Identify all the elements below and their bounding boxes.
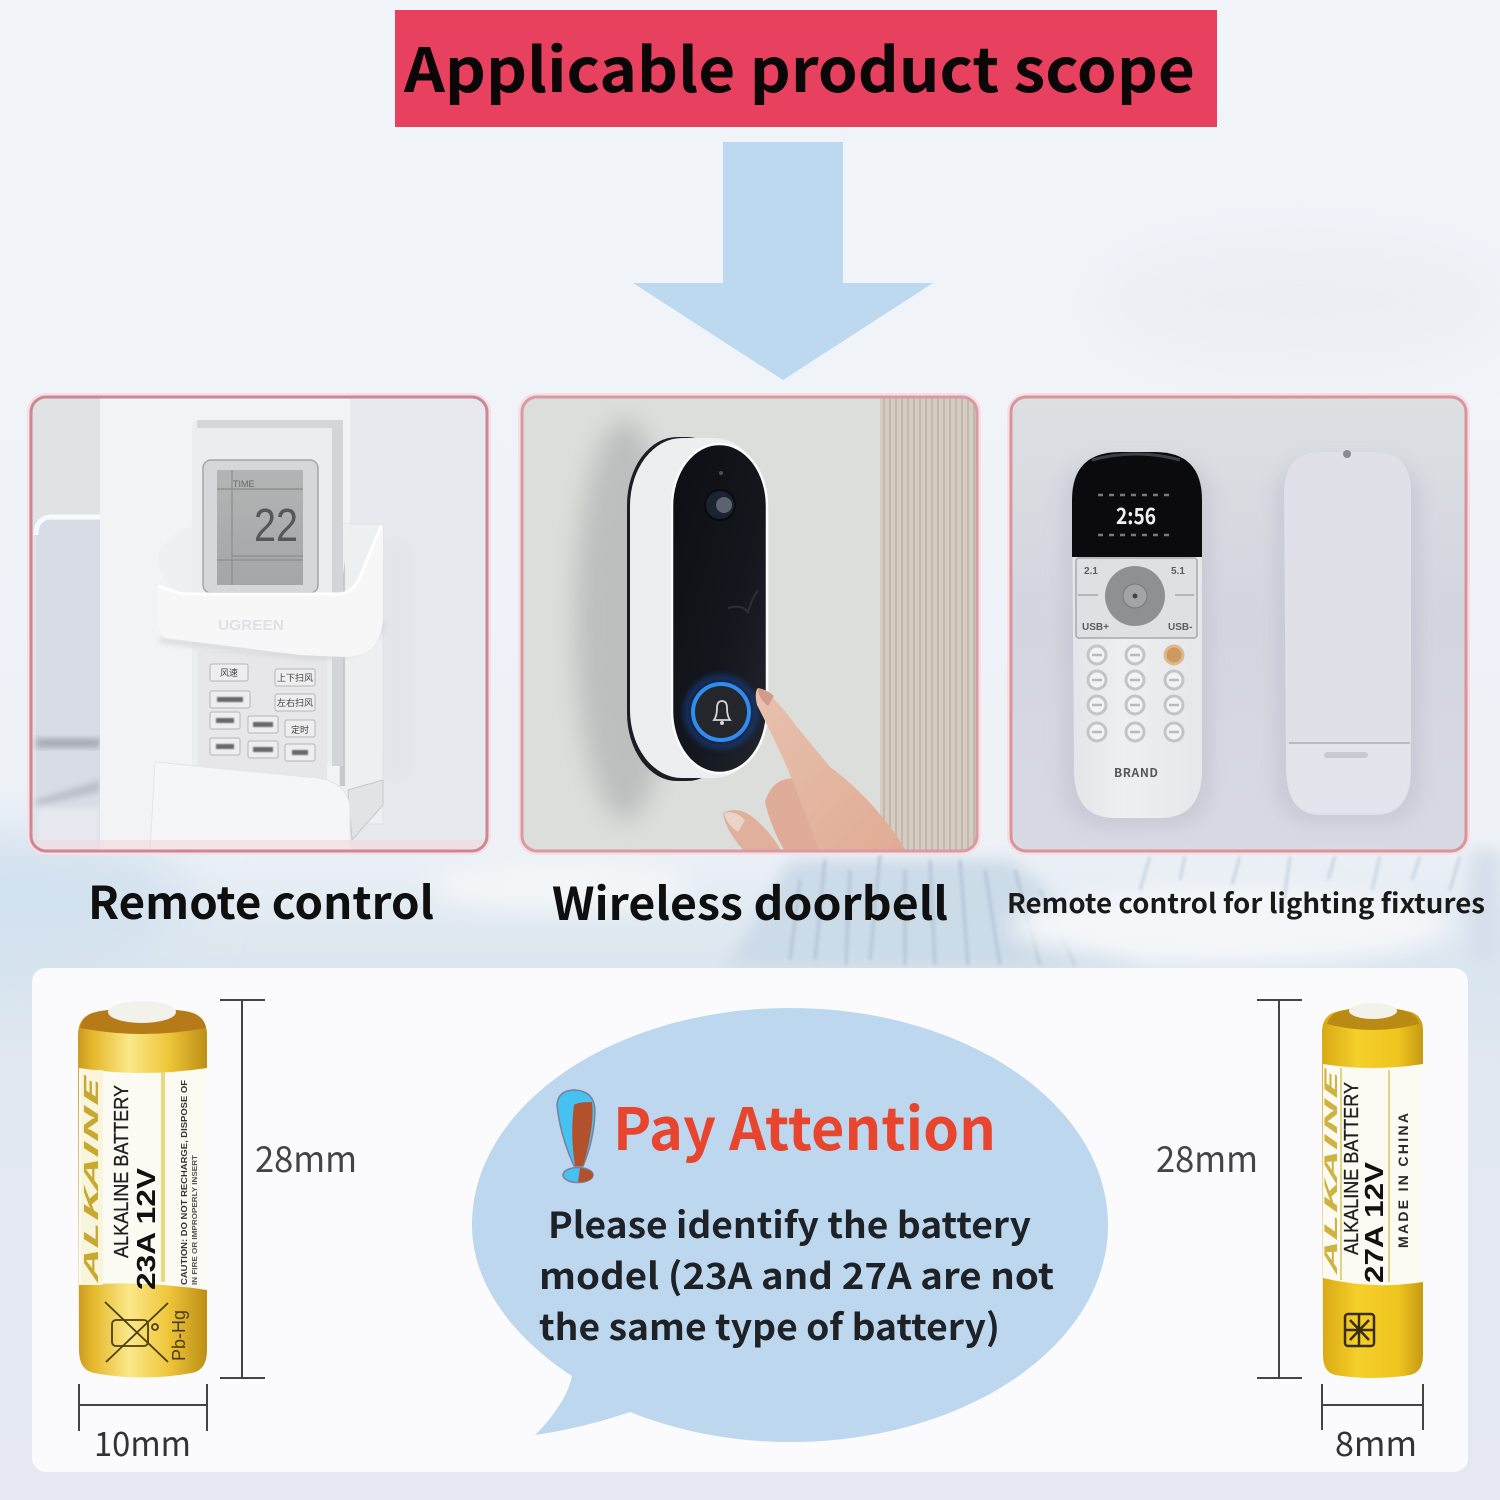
- dimension: 27A diameter: [1322, 1384, 1423, 1466]
- panel: wireless doorbell photo: [521, 396, 979, 852]
- remote front: 2:56: [1116, 499, 1156, 531]
- title banner: Applicable product scope: [403, 21, 1195, 110]
- warning message: Please identify the battery: [548, 1197, 1031, 1249]
- dimension: 27A diameter: 8mm: [1335, 1417, 1417, 1466]
- speech bubble: [472, 1008, 1108, 1442]
- battery 27A: [1317, 1003, 1423, 1378]
- caption: wireless doorbell: Wireless doorbell: [552, 868, 948, 933]
- dimension: 23A diameter: [79, 1384, 207, 1466]
- panel: battery comparison card: [32, 968, 1468, 1472]
- dimension: 23A diameter: 10mm: [94, 1417, 191, 1466]
- battery 23A: CAUTION: DO NOT RECHARGE, DISPOSE OF: [179, 1080, 189, 1285]
- caption: lighting remote: Remote control for lighting fixtures: [1007, 882, 1485, 921]
- arrow pointing down: [633, 142, 933, 380]
- dimension: 23A height: 28mm: [255, 1131, 357, 1183]
- icon: exclamation mark: [557, 1090, 595, 1182]
- panel: remote control photo: [30, 396, 488, 860]
- remote buttons: [1088, 646, 1183, 741]
- remote keypad: 风速: [220, 666, 238, 679]
- remote keypad: 定时: [291, 723, 309, 736]
- panel: lighting remote photo: [1010, 396, 1468, 852]
- remote keypad: 上下扫风: [277, 671, 313, 684]
- remote front: 2.1: [1084, 566, 1098, 577]
- holder front band: UGREEN: [218, 617, 284, 634]
- doorbell body: [627, 437, 767, 781]
- battery 23A: [77, 1001, 207, 1378]
- recycling mark: [1345, 1314, 1374, 1346]
- warning message: model (23A and 27A are not: [539, 1248, 1054, 1300]
- remote with LCD screen: [192, 420, 343, 766]
- remote back cover: [1284, 450, 1411, 815]
- remote with LCD screen: 22: [254, 499, 298, 551]
- doorbell glowing button: [687, 678, 755, 746]
- holder bottom flap: [150, 762, 384, 841]
- hand pressing button: [723, 688, 907, 852]
- heading: pay attention: Pay Attention: [613, 1083, 996, 1167]
- dimension: 23A height: [220, 1000, 357, 1378]
- warning message: [539, 1197, 1054, 1351]
- holder front band: [158, 524, 384, 657]
- battery 23A: ALKAINE: [77, 1074, 104, 1286]
- battery 23A: Pb-Hg: [169, 1310, 189, 1361]
- remote front: USB-: [1168, 622, 1192, 633]
- wall holder: [340, 524, 384, 824]
- dimension: 27A height: [1156, 1000, 1302, 1378]
- battery 23A: IN FIRE OR IMPROPERLY INSERT: [190, 1155, 199, 1285]
- remote keypad: [204, 664, 327, 780]
- directional pad: [1105, 566, 1165, 626]
- remote keypad: 左右扫风: [277, 696, 313, 709]
- remote with LCD screen: TIME: [233, 479, 254, 489]
- battery 23A: 23A 12V: [131, 1167, 161, 1290]
- caption: remote control: Remote control: [88, 867, 434, 932]
- remote front: USB+: [1082, 622, 1109, 633]
- recycle prohibited mark: [105, 1302, 168, 1362]
- battery 27A: MADE IN CHINA: [1395, 1113, 1411, 1248]
- battery 27A: 27A 12V: [1359, 1161, 1389, 1283]
- doorbell camera: [705, 471, 735, 520]
- battery 23A: ALKALINE BATTERY: [111, 1085, 133, 1258]
- remote front: [1072, 452, 1202, 818]
- remote front: 5.1: [1171, 566, 1185, 577]
- dimension: 27A height: 28mm: [1156, 1131, 1258, 1183]
- warning message: the same type of battery): [539, 1299, 1000, 1351]
- battery 27A: ALKAINE: [1317, 1066, 1342, 1278]
- remote front: BRAND: [1114, 764, 1158, 781]
- battery 27A: ALKALINE BATTERY: [1341, 1082, 1363, 1255]
